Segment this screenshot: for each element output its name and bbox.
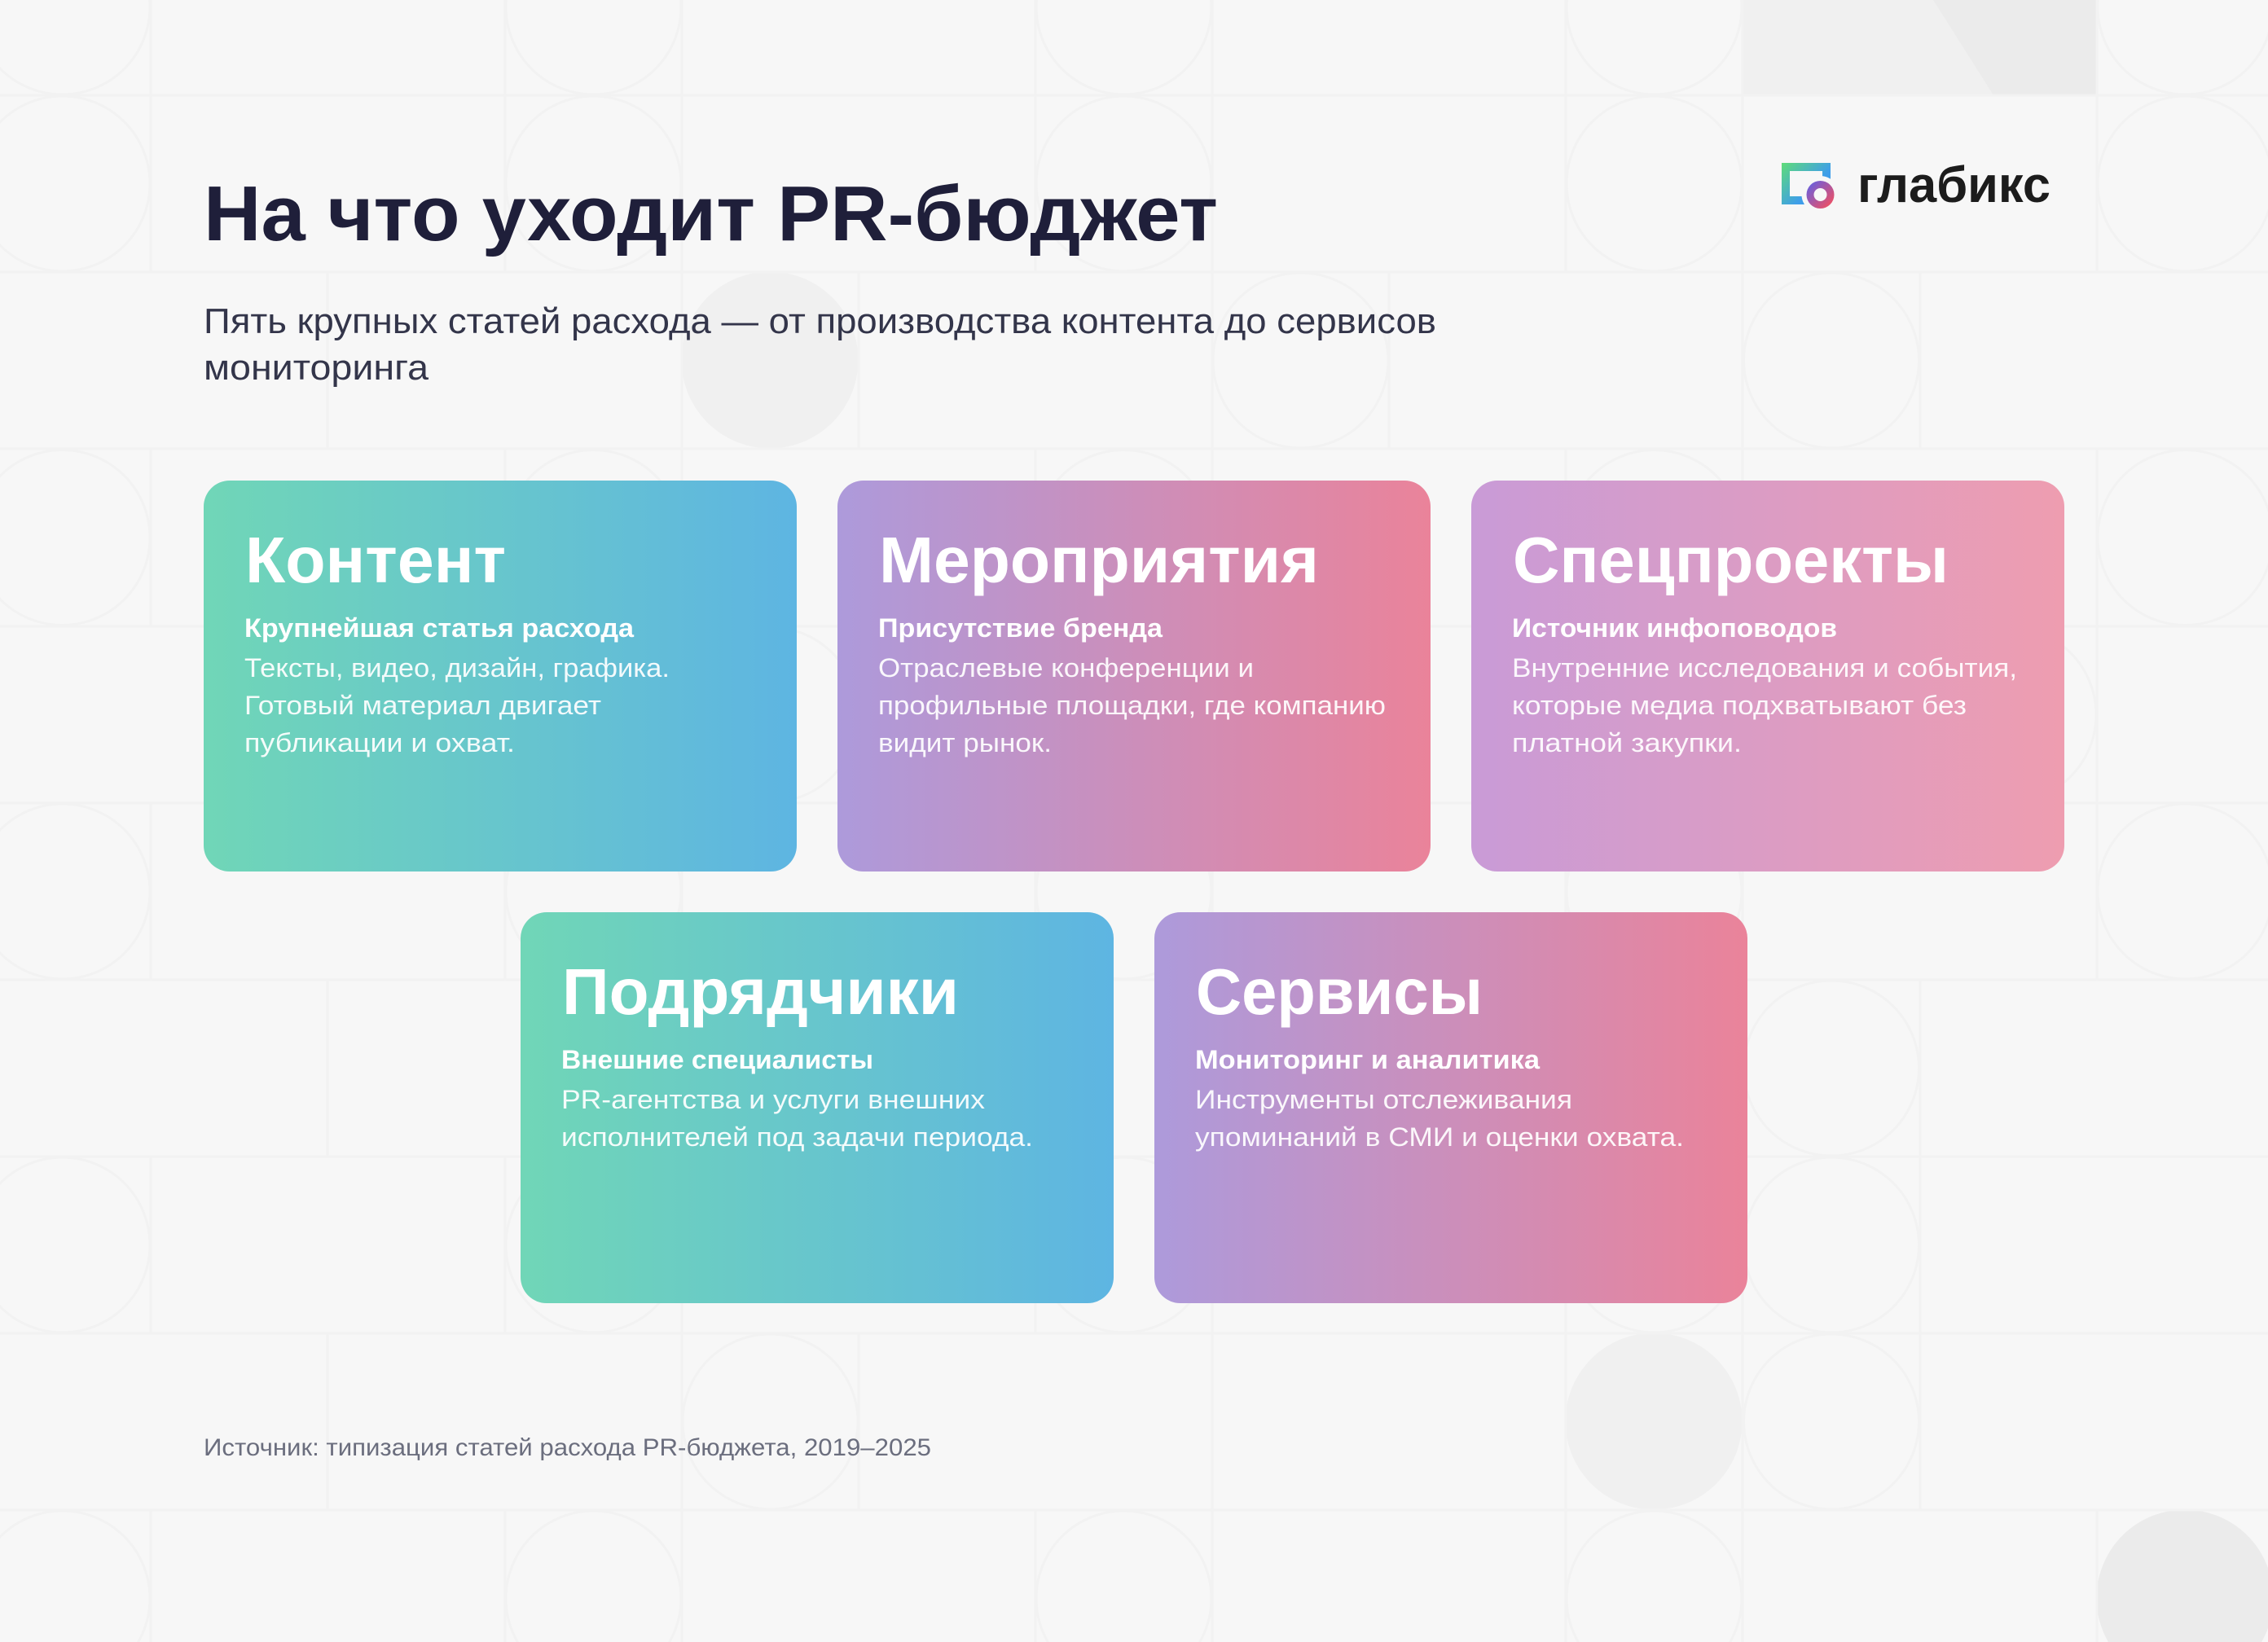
card heading: Контент xyxy=(245,524,506,596)
card body text: которые медиа подхватывают без xyxy=(1512,691,1967,720)
card subheading: Источник инфоповодов xyxy=(1512,613,1837,643)
card heading: Спецпроекты xyxy=(1513,524,1949,596)
icon: logo frame and ring xyxy=(1782,163,1839,213)
card heading: Мероприятия xyxy=(879,524,1319,596)
card body text: Тексты, видео, дизайн, графика. xyxy=(244,653,670,683)
card body text: исполнителей под задачи периода. xyxy=(561,1122,1033,1152)
card body text xyxy=(1195,1085,1684,1152)
card body text: Инструменты отслеживания xyxy=(1195,1085,1572,1114)
panel: Спецпроекты xyxy=(1471,481,2064,871)
card body text: Внутренние исследования и события, xyxy=(1512,653,2017,683)
card body text: Готовый материал двигает xyxy=(244,691,601,720)
card body text: платной закупки. xyxy=(1512,728,1742,757)
card body text xyxy=(1512,653,2017,757)
card subheading: Мониторинг и аналитика xyxy=(1195,1045,1540,1074)
subtitle: мониторинга xyxy=(204,348,429,388)
card subheading: Крупнейшая статья расхода xyxy=(244,613,634,643)
card body text: видит рынок. xyxy=(878,728,1052,757)
source note: Источник: типизация статей расхода PR-бюджета, 2019–2025 xyxy=(204,1434,931,1461)
subtitle: Пять крупных статей расхода — от производства контента до сервисов xyxy=(204,301,1436,341)
card body text xyxy=(878,653,1386,757)
logo wordmark: глабикс xyxy=(1857,157,2050,213)
card subheading: Присутствие бренда xyxy=(878,613,1163,643)
panel: Подрядчики xyxy=(521,912,1114,1303)
logo xyxy=(1782,157,2050,213)
panel: Сервисы xyxy=(1154,912,1747,1303)
card body text: публикации и охват. xyxy=(244,728,515,757)
title: На что уходит PR-бюджет xyxy=(204,170,1218,257)
card body text: упоминаний в СМИ и оценки охвата. xyxy=(1195,1122,1684,1152)
card body text: PR-агентства и услуги внешних xyxy=(561,1085,985,1114)
card subheading: Внешние специалисты xyxy=(561,1045,873,1074)
subtitle xyxy=(204,301,1436,388)
panel: Мероприятия xyxy=(837,481,1431,871)
card body text xyxy=(561,1085,1033,1152)
card body text: Отраслевые конференции и xyxy=(878,653,1254,683)
panel: Контент xyxy=(204,481,797,871)
card body text xyxy=(244,653,670,757)
card heading: Подрядчики xyxy=(562,955,959,1028)
card heading: Сервисы xyxy=(1196,955,1483,1028)
card body text: профильные площадки, где компанию xyxy=(878,691,1386,720)
